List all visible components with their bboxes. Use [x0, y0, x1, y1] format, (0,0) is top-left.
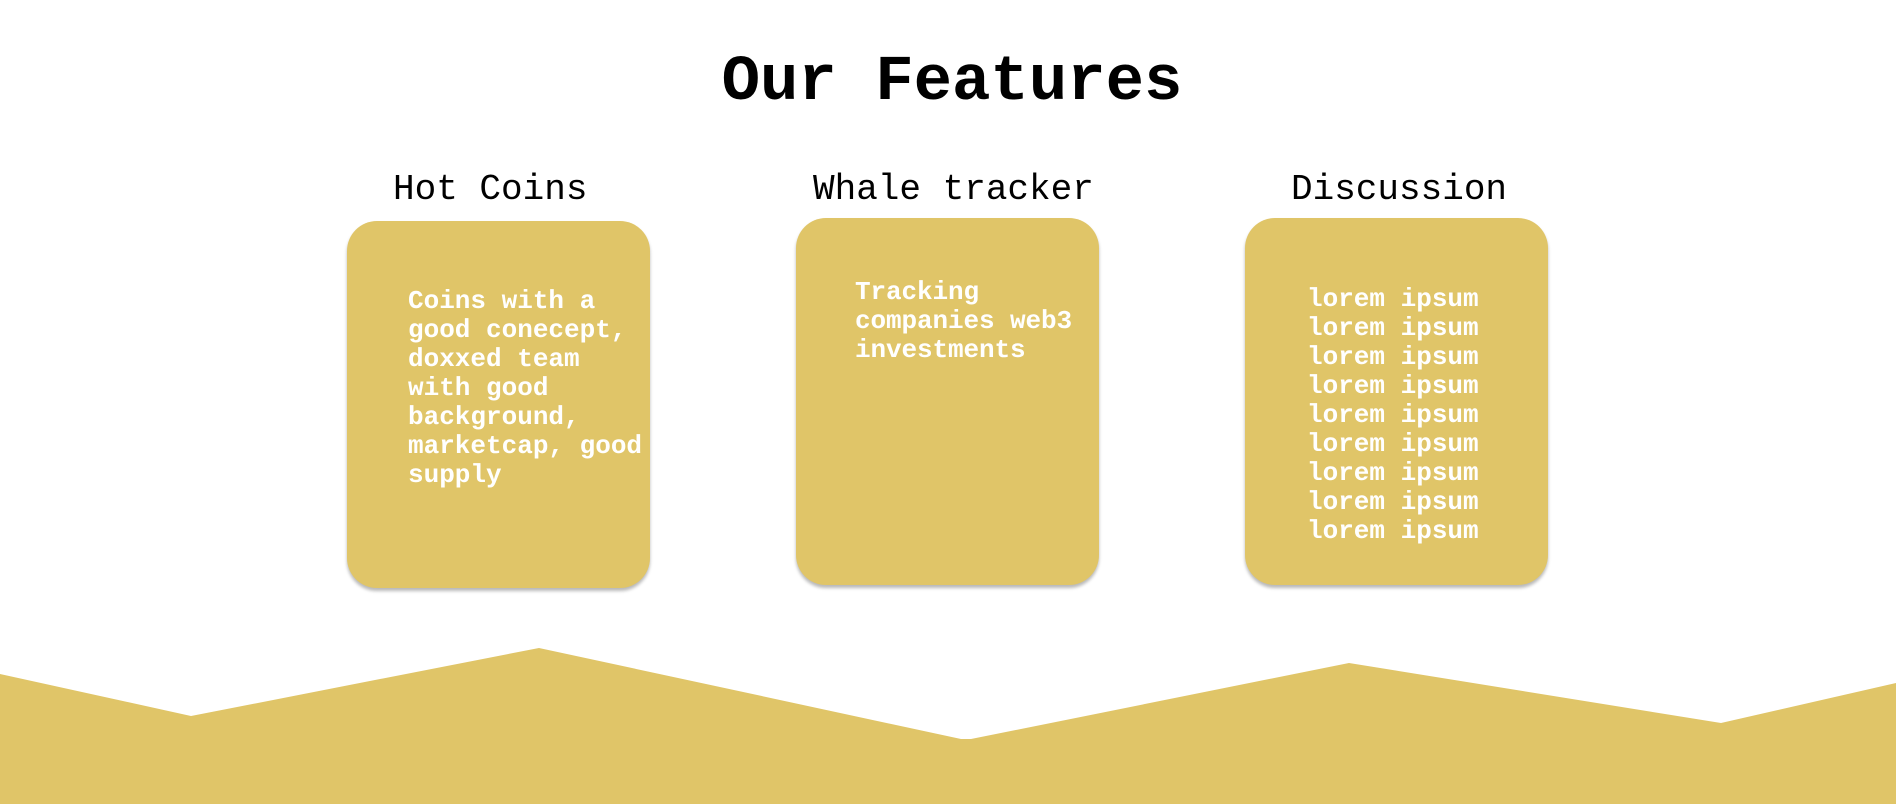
text: Hot Coins description: background, [408, 402, 580, 432]
text: Hot Coins description: with good [408, 373, 548, 403]
text: Discussion lorem ipsum list: lorem ipsum [1307, 400, 1479, 430]
heading: Hot Coins: Hot Coins [393, 169, 587, 210]
panel: Discussion card [1245, 218, 1548, 585]
text: Hot Coins description: Coins with a [408, 286, 595, 316]
text: Hot Coins description: good conecept, [408, 315, 626, 345]
title: Our Features [722, 47, 1182, 119]
text: Discussion lorem ipsum list [1307, 284, 1479, 546]
text: Discussion lorem ipsum list: lorem ipsum [1307, 313, 1479, 343]
text: Whale tracker description: companies web3 [855, 306, 1072, 336]
panel: Hot Coins card [347, 221, 650, 588]
text: Discussion lorem ipsum list: lorem ipsum [1307, 429, 1479, 459]
text: Hot Coins description [408, 286, 642, 490]
text: Discussion lorem ipsum list: lorem ipsum [1307, 342, 1479, 372]
text: Discussion lorem ipsum list: lorem ipsum [1307, 487, 1479, 517]
text: Whale tracker description: investments [855, 335, 1026, 365]
text: Discussion lorem ipsum list: lorem ipsum [1307, 284, 1479, 314]
text: Discussion lorem ipsum list: lorem ipsum [1307, 371, 1479, 401]
panel: Whale tracker card [796, 218, 1099, 585]
text: Whale tracker description: Tracking [855, 277, 979, 307]
text: Discussion lorem ipsum list: lorem ipsum [1307, 516, 1479, 546]
heading: Whale tracker: Whale tracker [813, 169, 1094, 210]
heading: Discussion: Discussion [1291, 169, 1507, 210]
text: Discussion lorem ipsum list: lorem ipsum [1307, 458, 1479, 488]
text: Hot Coins description: supply [408, 460, 502, 490]
text: Hot Coins description: marketcap, good [408, 431, 642, 461]
text: Hot Coins description: doxxed team [408, 344, 580, 374]
text: Whale tracker description [855, 277, 1072, 365]
